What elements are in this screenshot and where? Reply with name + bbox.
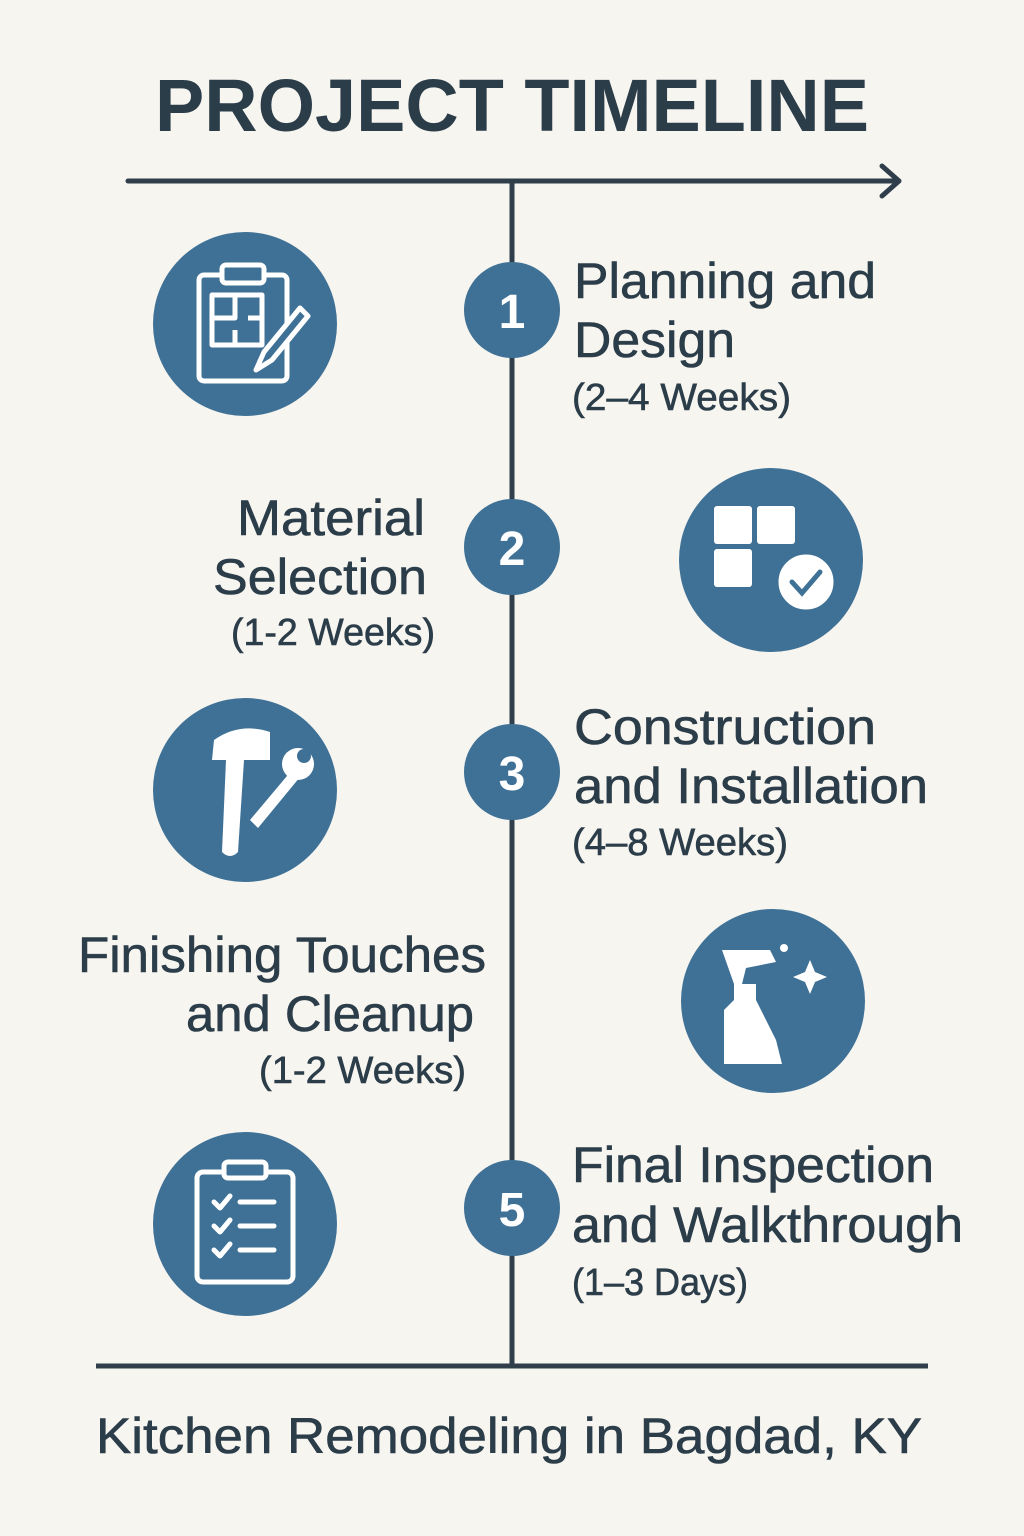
step 2 marker: 2 [499, 523, 525, 576]
icon: spray bottle [681, 909, 865, 1093]
icon: checklist clipboard [153, 1132, 337, 1316]
text: step 3: and Installation [574, 758, 928, 814]
text: step 1 [572, 253, 876, 419]
icon: tiles with check [679, 468, 863, 652]
text: step 2 [213, 490, 435, 654]
bottom line [96, 1364, 928, 1368]
text: step 1: Planning and [574, 253, 876, 309]
text: step 1: (2–4 Weeks) [572, 377, 791, 419]
step 2 marker [464, 499, 560, 595]
text: step 4: and Cleanup [186, 986, 474, 1042]
footer: Kitchen Remodeling in Bagdad, KY [96, 1408, 922, 1464]
text: step 4: (1-2 Weeks) [259, 1050, 466, 1092]
icon: clipboard plan [153, 232, 337, 416]
step 5 marker: 5 [499, 1184, 525, 1237]
text: step 5: Final Inspection [572, 1137, 934, 1193]
text: step 2: (1-2 Weeks) [231, 612, 435, 654]
text: step 5 [572, 1137, 963, 1304]
text: step 5: (1–3 Days) [572, 1262, 748, 1304]
step 3 marker: 3 [499, 748, 525, 801]
text: step 3 [572, 699, 928, 864]
text: step 4: Finishing Touches [78, 927, 486, 983]
text: step 3: Construction [574, 699, 876, 755]
text: step 3: (4–8 Weeks) [572, 822, 788, 864]
text: step 5: and Walkthrough [572, 1197, 963, 1253]
icon: hammer and wrench [153, 698, 337, 882]
title: PROJECT TIMELINE [155, 64, 869, 147]
text: step 2: Material [237, 490, 425, 546]
step 1 marker [464, 262, 560, 358]
vertical timeline line [510, 181, 514, 1366]
text: step 4 [78, 927, 486, 1092]
step 3 marker [464, 724, 560, 820]
step 1 marker: 1 [499, 286, 525, 339]
arrow: timeline top [128, 166, 899, 196]
text: step 2: Selection [213, 549, 427, 605]
step 5 marker [464, 1160, 560, 1256]
text: step 1: Design [574, 312, 735, 368]
